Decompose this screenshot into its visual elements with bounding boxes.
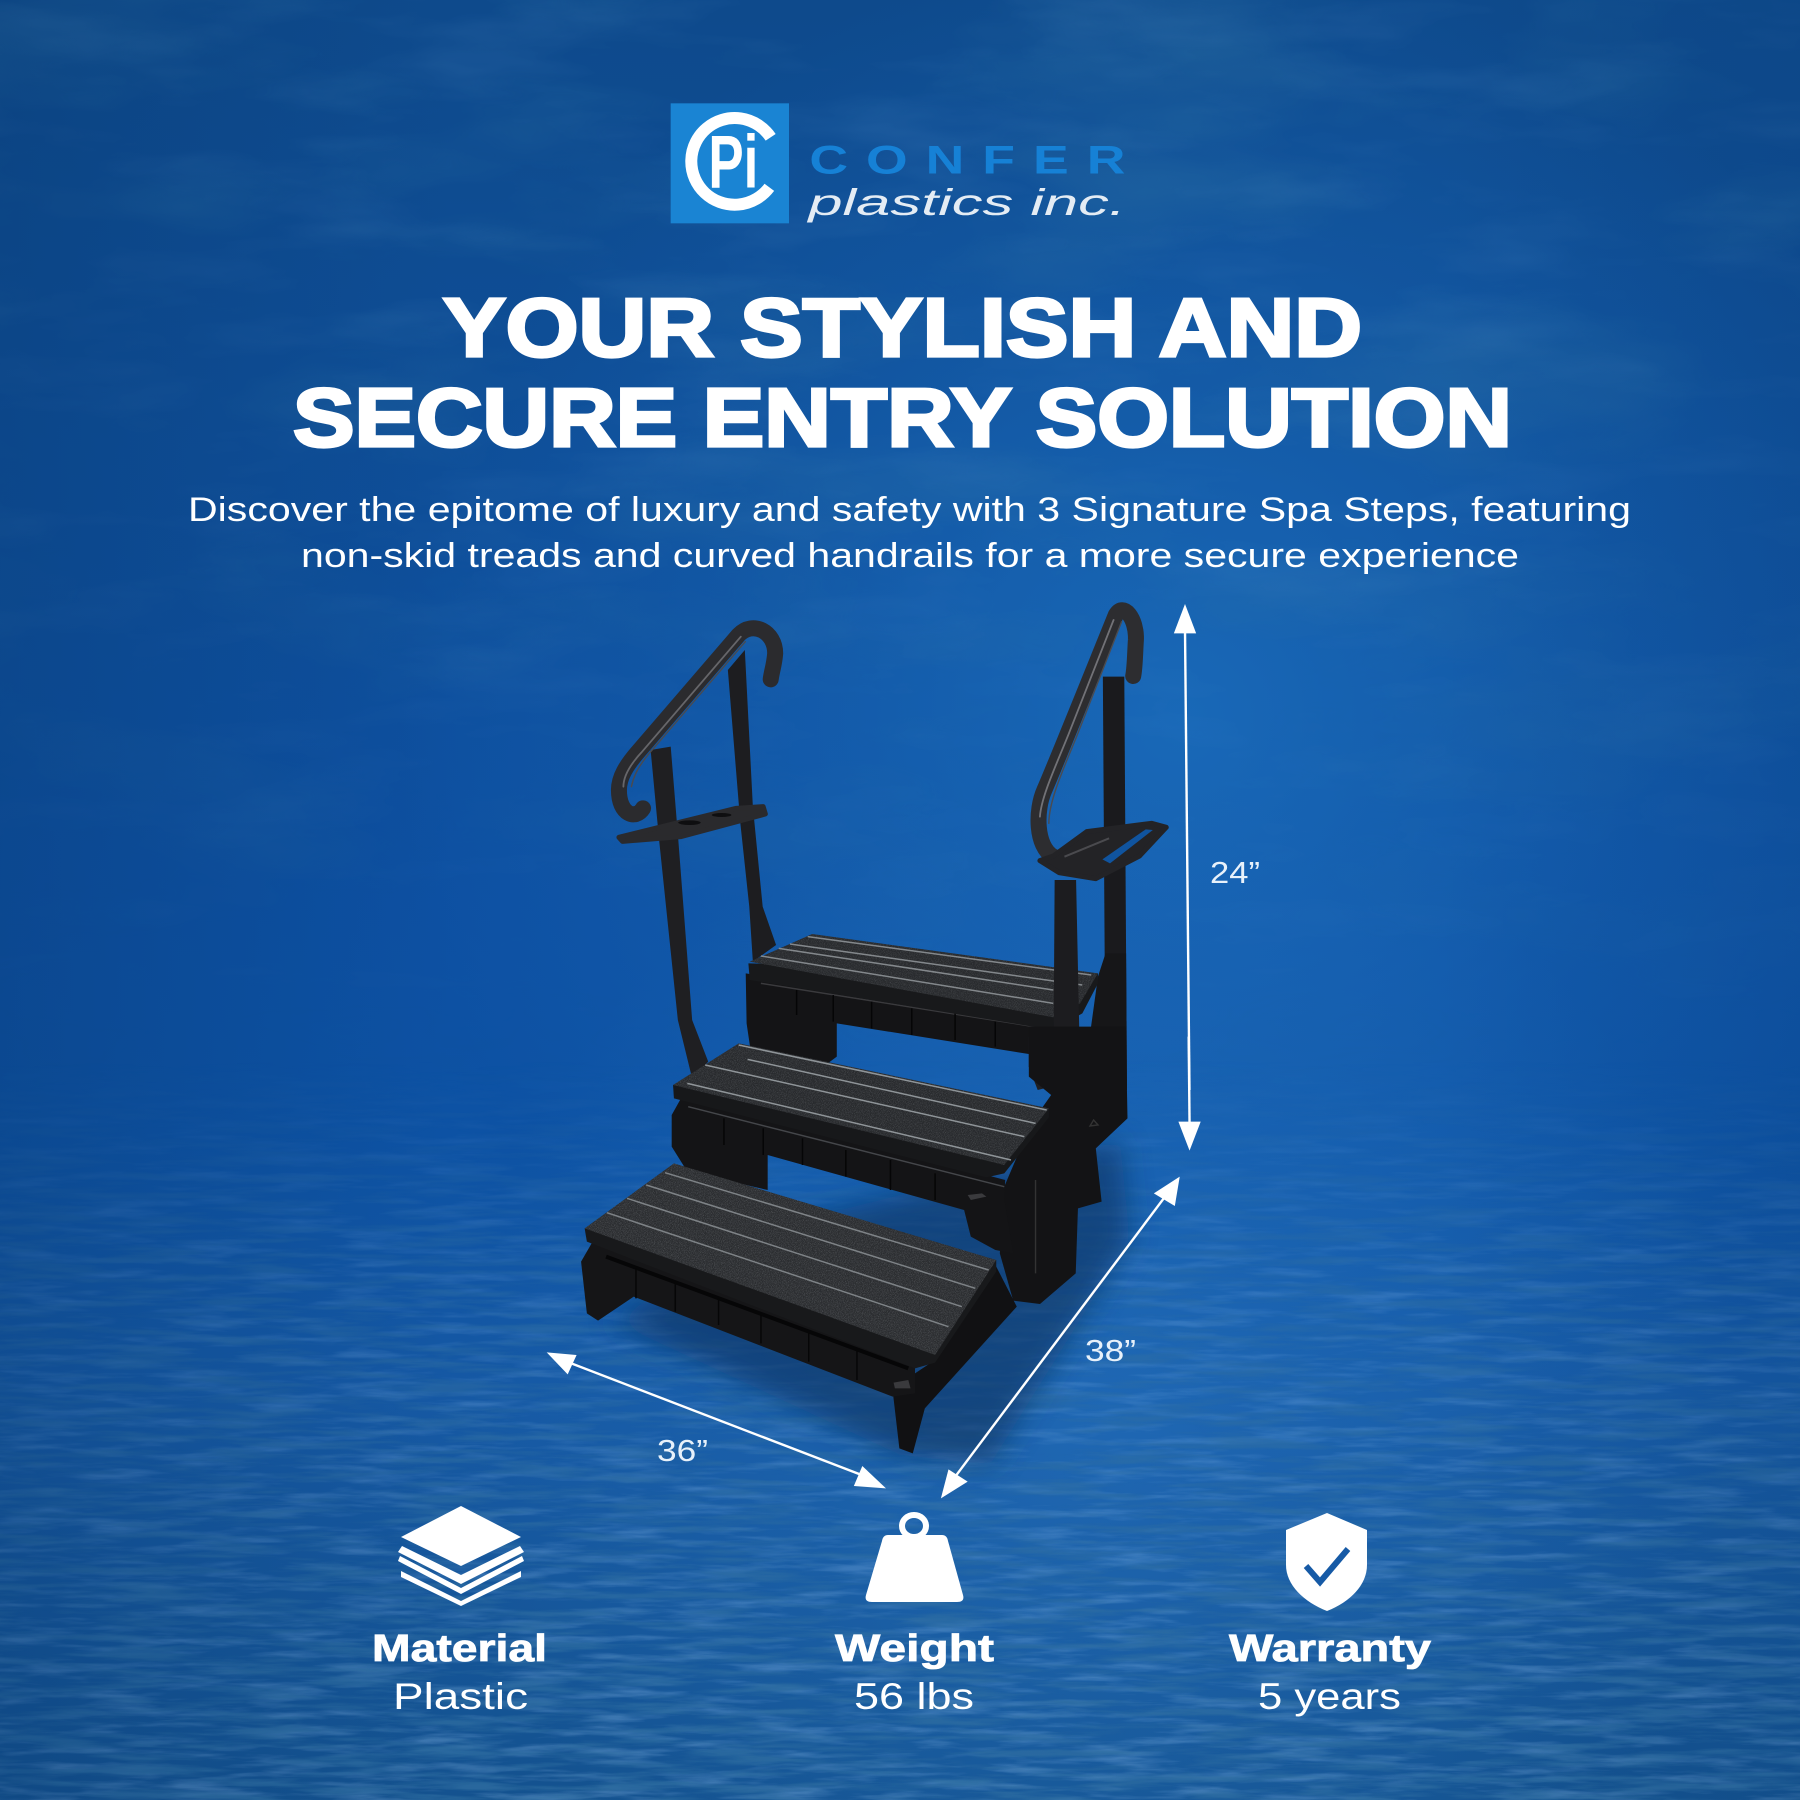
product: spa steps lower section xyxy=(547,1027,1201,1498)
weight heading: Weight xyxy=(835,1628,994,1670)
floor shadow under steps xyxy=(610,1140,1130,1465)
second step tread xyxy=(673,1043,1049,1165)
bottom step right leg and side panel xyxy=(892,1267,1017,1453)
logo wordmark: CONFER: CONFER xyxy=(809,137,1143,182)
left tray xyxy=(619,807,765,841)
second step riser and legs xyxy=(672,1095,1013,1253)
subtitle: non-skid treads and curved handrails for a more secure experience xyxy=(301,537,1519,575)
weight value: 56 lbs xyxy=(854,1676,974,1717)
product: spa steps upper section xyxy=(619,604,1196,1090)
icon: shield with check xyxy=(1286,1513,1367,1611)
left handrail post front xyxy=(651,747,708,1078)
bottom step riser and legs xyxy=(581,1240,915,1397)
right rear post xyxy=(1103,677,1127,1090)
top step tread lip xyxy=(748,963,1098,1030)
top step tread xyxy=(750,934,1098,1017)
dimension arrow: height upper part xyxy=(1174,604,1196,1090)
right tray xyxy=(1040,823,1166,879)
logo wordmark: plastics inc.: plastics inc. xyxy=(807,181,1126,223)
main side column xyxy=(1000,1027,1128,1304)
label: 36 inches: 36” xyxy=(657,1433,708,1468)
dimension arrow: width 36 inches xyxy=(547,1352,886,1488)
label: 24 inches: 24” xyxy=(1210,855,1260,890)
top step riser and legs xyxy=(746,973,1053,1090)
title: SECURE ENTRY SOLUTION xyxy=(293,371,1512,464)
dimension arrow: height lower part xyxy=(1178,1037,1201,1151)
dimension arrow: depth 38 inches xyxy=(941,1177,1180,1498)
spec: weight xyxy=(835,1515,994,1717)
right handrail xyxy=(1039,610,1136,857)
bottom step tread lip xyxy=(585,1228,996,1368)
icon: weight xyxy=(866,1515,963,1602)
second step tread lip xyxy=(673,1085,1049,1177)
title xyxy=(293,281,1512,464)
icon: stacked layers xyxy=(398,1506,524,1606)
subtitle: Discover the epitome of luxury and safety with 3 Signature Spa Steps, featuring xyxy=(188,491,1631,529)
bottom step tread xyxy=(585,1163,996,1355)
left handrail post rear xyxy=(728,650,776,962)
right front post xyxy=(1053,880,1081,1090)
material value: Plastic xyxy=(393,1676,528,1717)
logo: Confer Plastics xyxy=(671,103,1143,223)
title: YOUR STYLISH AND xyxy=(443,281,1362,374)
logo mark: CPI square xyxy=(671,103,789,223)
logo mark: CPI square: Pi xyxy=(708,119,758,203)
warranty value: 5 years xyxy=(1258,1676,1401,1717)
left handrail xyxy=(619,628,775,814)
subtitle xyxy=(188,491,1631,575)
label: 38 inches: 38” xyxy=(1085,1333,1136,1368)
spec: warranty xyxy=(1229,1513,1431,1717)
material heading: Material xyxy=(372,1628,547,1670)
warranty heading: Warranty xyxy=(1229,1628,1431,1670)
spec: material xyxy=(372,1506,547,1717)
right rear brace xyxy=(1082,953,1127,1090)
